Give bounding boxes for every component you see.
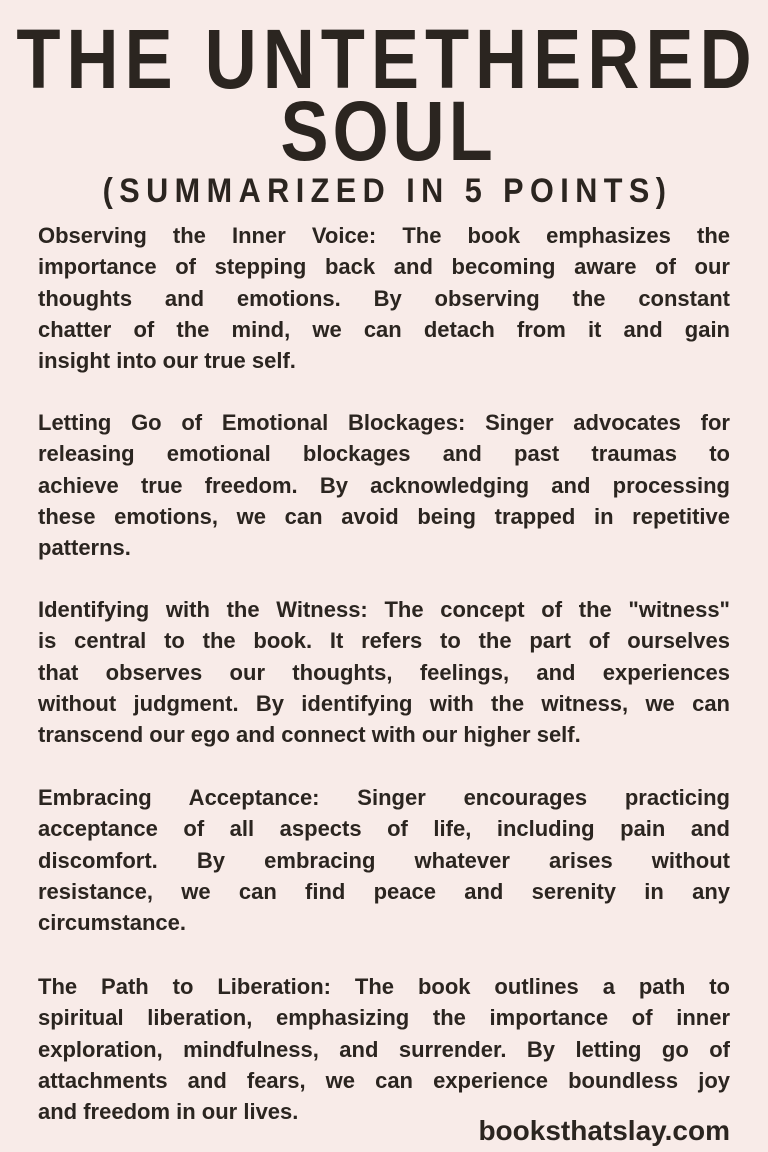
point 3: [38, 597, 730, 747]
point 2: [38, 410, 730, 560]
point 3: without judgment. By identifying with the witness, we can: [38, 691, 730, 716]
title line 2: SOUL: [280, 84, 493, 178]
point 4: discomfort. By embracing whatever arises without: [38, 848, 730, 872]
point 4: acceptance of all aspects of life, including pain and: [38, 816, 730, 841]
point 3: is central to the book. It refers to the part of ourselves: [38, 628, 730, 653]
point 5: and freedom in our lives.: [38, 1099, 298, 1124]
point 1: importance of stepping back and becoming aware of our: [38, 254, 730, 279]
point 4: circumstance.: [38, 910, 186, 935]
point 4: Embracing Acceptance: Singer encourages practicing: [38, 785, 730, 810]
footer url: booksthatslay.com: [478, 1115, 730, 1146]
point 1: chatter of the mind, we can detach from it and gain: [38, 317, 730, 342]
subtitle: (SUMMARIZED IN 5 POINTS): [103, 172, 666, 209]
point 1: thoughts and emotions. By observing the constant: [38, 286, 730, 310]
point 5: [38, 974, 730, 1124]
point 2: patterns.: [38, 535, 131, 560]
point 5: spiritual liberation, emphasizing the importance of inner: [38, 1005, 730, 1030]
point 1: Observing the Inner Voice: The book emphasizes the: [38, 223, 730, 248]
point 5: attachments and fears, we can experience boundless joy: [38, 1068, 730, 1093]
point 5: The Path to Liberation: The book outlines a path to: [38, 974, 730, 999]
title line 1: THE UNTETHERED: [16, 12, 752, 106]
point 5: exploration, mindfulness, and surrender. By letting go of: [38, 1036, 730, 1062]
point 2: Letting Go of Emotional Blockages: Singer advocates for: [38, 410, 730, 435]
point 2: these emotions, we can avoid being trapped in repetitive: [38, 504, 730, 529]
point 3: that observes our thoughts, feelings, and experiences: [38, 660, 730, 684]
point 2: releasing emotional blockages and past traumas to: [38, 441, 730, 466]
point 1: insight into our true self.: [38, 348, 296, 373]
point 4: [38, 785, 730, 935]
point 3: Identifying with the Witness: The concept of the "witness": [38, 597, 730, 622]
title: [16, 12, 752, 209]
point 1: [38, 223, 730, 373]
point 4: resistance, we can find peace and serenity in any: [38, 879, 730, 904]
point 3: transcend our ego and connect with our higher self.: [38, 722, 581, 747]
point 2: achieve true freedom. By acknowledging and processing: [38, 472, 730, 498]
